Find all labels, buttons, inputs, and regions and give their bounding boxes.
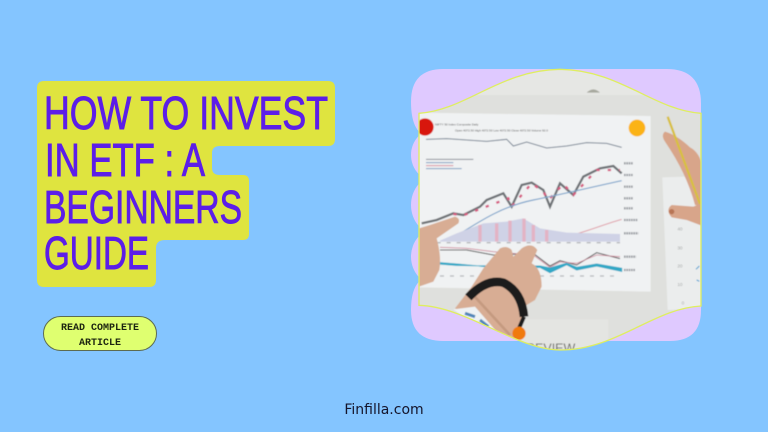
- right sheet: 30: [677, 245, 683, 250]
- right sheet: 20: [677, 264, 683, 269]
- center hand and arm: [453, 245, 542, 340]
- title block: [37, 81, 335, 287]
- right sheet: 40: [677, 227, 683, 232]
- title highlight shape: [37, 81, 335, 287]
- indicator line: [426, 139, 622, 148]
- left hand: [419, 217, 459, 287]
- chart sheet: Open 4072.50 High 4072.50 Low 4072.50 Close 4072.50 Volume 92.0: [455, 128, 548, 132]
- pushpins: [416, 118, 645, 136]
- lower oscillator: [440, 250, 620, 266]
- footer: site name: Finfilla.com: [344, 402, 424, 418]
- moving average: [464, 180, 622, 231]
- legend lines: [426, 159, 473, 169]
- photo panel: [411, 67, 707, 356]
- title text: GUIDE: [44, 227, 149, 279]
- price line: [422, 166, 622, 223]
- right sheet: 10: [677, 282, 683, 287]
- button: read complete article: [44, 316, 156, 350]
- title text: BEGINNERS: [44, 181, 242, 233]
- axis labels: [624, 163, 638, 270]
- button: read complete article: ARTICLE: [79, 338, 121, 349]
- histogram: [439, 263, 622, 273]
- chart sheet: [419, 113, 651, 292]
- review card: REVIEW: [526, 342, 575, 356]
- white wristband: [454, 306, 496, 330]
- right sheet: [662, 176, 700, 310]
- chart heading text: NIFTY 50 Index Composite Daily: [435, 122, 479, 126]
- volume bars: [440, 218, 620, 242]
- wall hook: [587, 89, 600, 93]
- photo of chart with hands: [413, 67, 707, 356]
- black bracelet: [468, 282, 524, 317]
- review card: [528, 343, 576, 350]
- title text: IN ETF : A: [45, 134, 205, 186]
- title text: HOW TO INVEST: [44, 87, 328, 139]
- title text: [44, 87, 328, 279]
- lilac scalloped backdrop: [411, 69, 701, 341]
- photo wave outline: [419, 69, 701, 350]
- orange bead: [512, 327, 526, 340]
- right hand with pen: [663, 117, 703, 226]
- button: read complete article: READ COMPLETE: [61, 323, 139, 334]
- right sheet: 0: [682, 300, 685, 305]
